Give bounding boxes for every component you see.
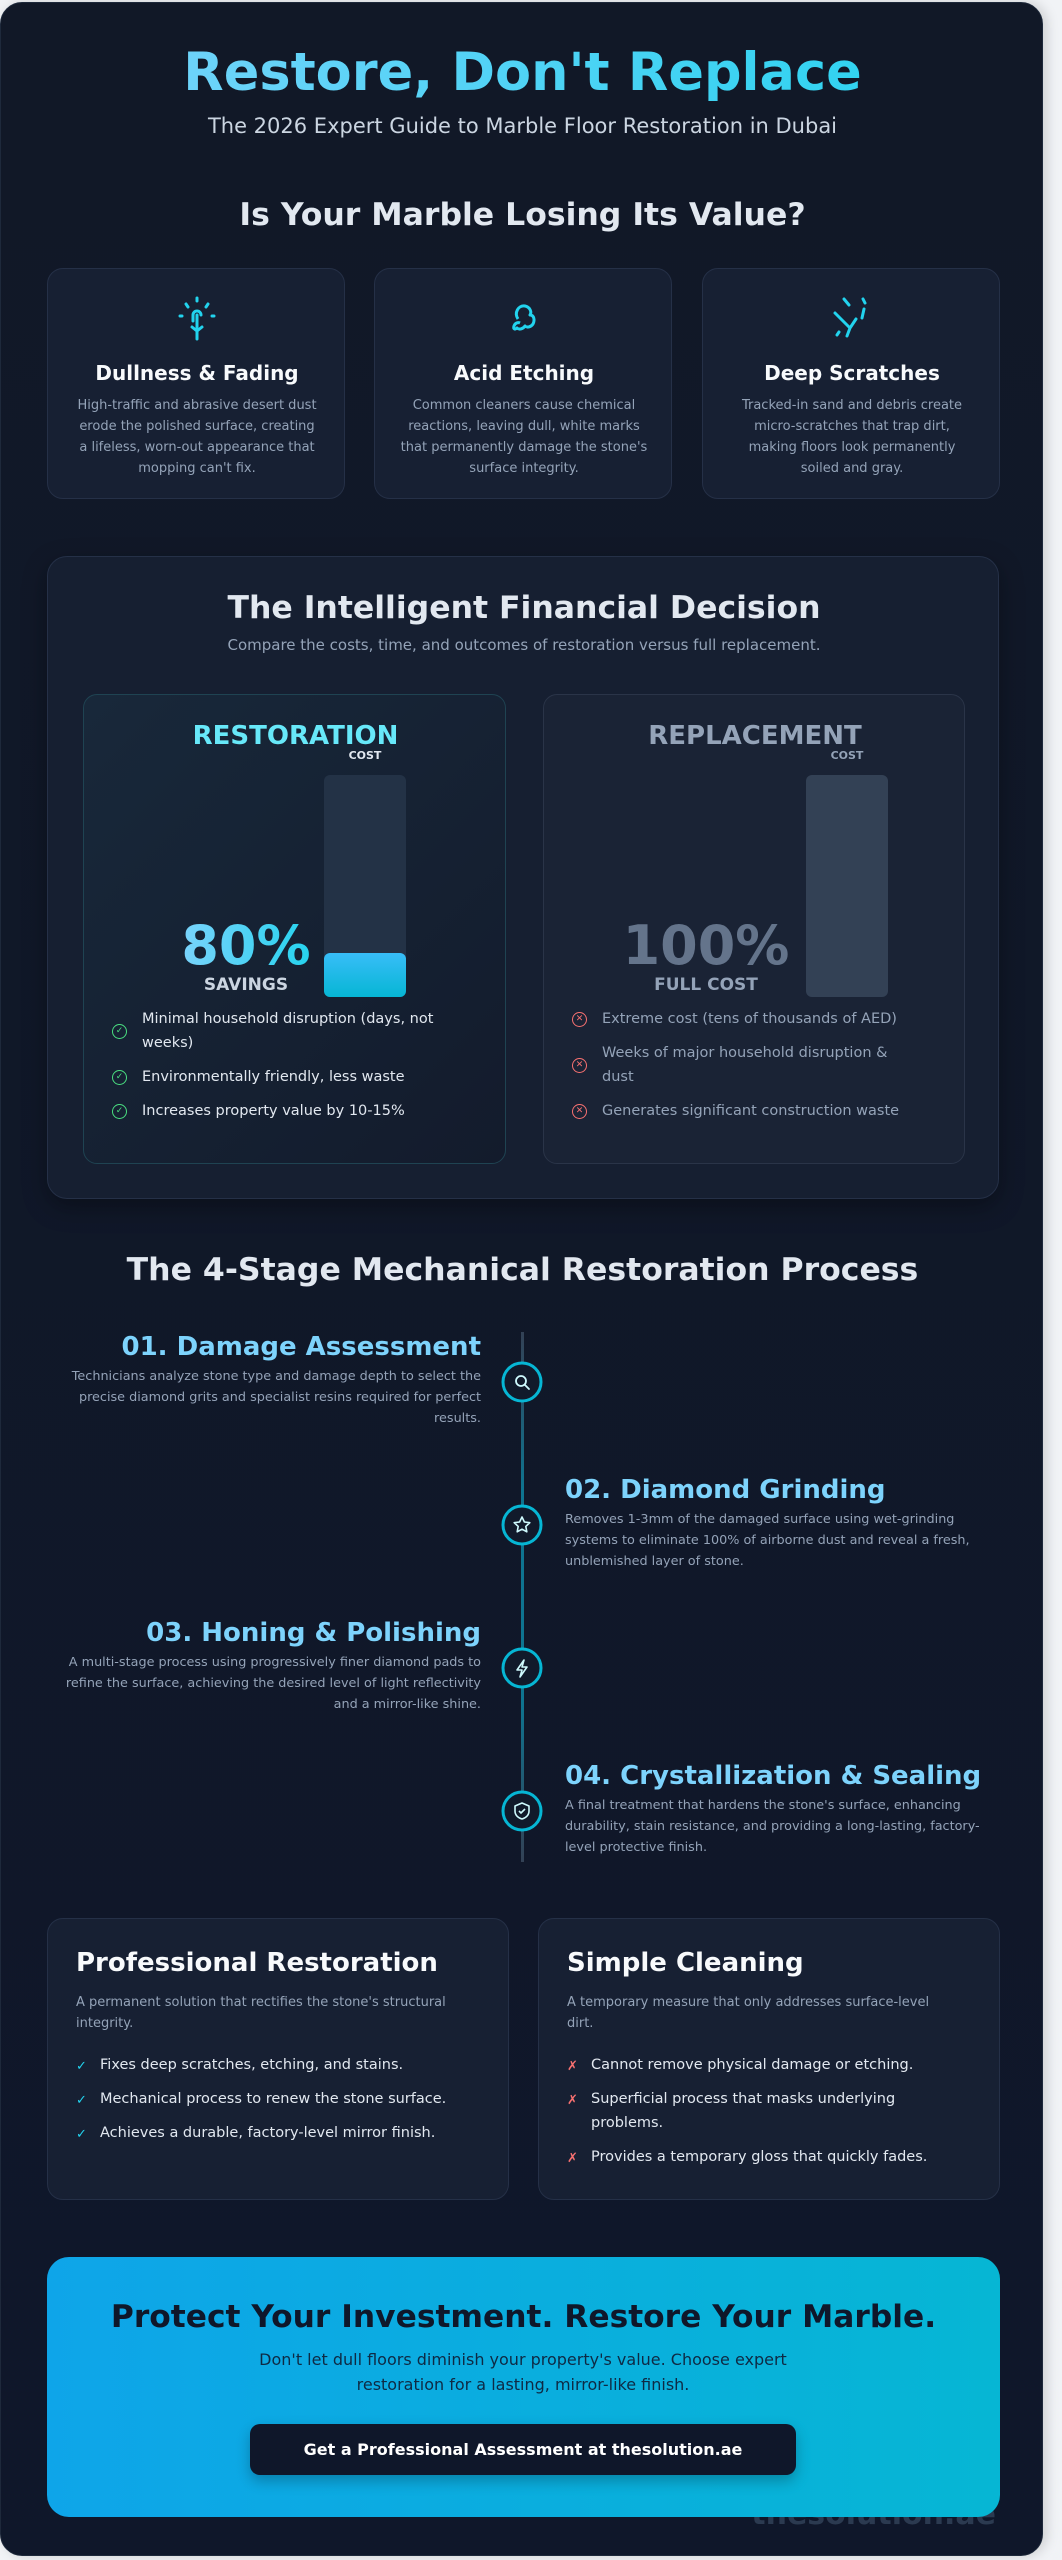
icon: drop <box>512 304 536 331</box>
text: dullness: High-traffic and abrasive desert dust erode the polished surface, creating a lifeless, worn-out appearance that mopping can't fix. <box>77 398 317 476</box>
list: professional: ✓ <box>76 2127 87 2142</box>
panel: scratches <box>702 268 1000 499</box>
icon: sparkle <box>178 296 216 340</box>
list: professional: ✓ <box>76 2093 87 2108</box>
step 2 <box>565 1475 970 1569</box>
stat: 80%: SAVINGS <box>204 975 288 995</box>
button <box>250 2424 796 2475</box>
list: professional: Fixes deep scratches, etching, and stains. <box>100 2057 403 2073</box>
panel: restoration <box>83 694 506 1164</box>
text: scratches <box>742 361 962 476</box>
list: restoration benefits: Minimal household disruption (days, not weeks) <box>142 1011 433 1051</box>
title <box>1 40 1044 106</box>
step 1 <box>72 1332 481 1426</box>
step 1: Technicians analyze stone type and damage depth to select the precise diamond grits and specialist resins required for perfect results. <box>72 1369 481 1426</box>
list: professional: Achieves a durable, factory-level mirror finish. <box>100 2125 435 2141</box>
list: replacement drawbacks: Weeks of major household disruption & dust <box>602 1045 887 1085</box>
list: restoration benefits: ✓ <box>116 1072 123 1082</box>
text: acid: Acid Etching <box>454 361 594 385</box>
label: cost: COST <box>349 749 381 762</box>
stat: 80%: 80% <box>181 914 311 977</box>
step 3: A multi-stage process using progressively finer diamond pads to refine the surface, achieving the desired level of light reflectivity and a mirror-like shine. <box>66 1655 481 1712</box>
watermark: thesolution.ae <box>751 2497 996 2532</box>
panel: dullness <box>47 268 345 499</box>
list: restoration benefits: Environmentally friendly, less waste <box>142 1069 405 1085</box>
list: simple: ✗ <box>567 2059 578 2074</box>
list: replacement drawbacks: ✕ <box>576 1060 583 1070</box>
step 2: Removes 1-3mm of the damaged surface using wet-grinding systems to eliminate 100% of airborne dust and reveal a fresh, unblemished layer of stone. <box>565 1512 970 1569</box>
panel: acid <box>374 268 672 499</box>
panel: call to action <box>47 2257 1000 2517</box>
text: acid <box>401 361 647 476</box>
list: professional <box>76 2057 446 2142</box>
bar chart: restoration <box>324 775 406 997</box>
icon: shield <box>502 1790 542 1832</box>
panel: replacement <box>543 694 965 1164</box>
label: replacement: REPLACEMENT <box>648 721 862 751</box>
heading: simple: Simple Cleaning <box>567 1948 804 1978</box>
heading: financial: The Intelligent Financial Decision <box>227 590 821 626</box>
title: Restore, Don't Replace <box>183 42 862 103</box>
text: compare: Compare the costs, time, and outcomes of restoration versus full replacement. <box>227 636 820 654</box>
icon: search <box>502 1362 542 1402</box>
icon: bolt <box>502 1648 542 1688</box>
text: dullness: Dullness & Fading <box>95 361 299 385</box>
list: simple: ✗ <box>567 2151 578 2166</box>
heading: value: Is Your Marble Losing Its Value? <box>239 197 806 233</box>
label: restoration: RESTORATION <box>193 721 398 751</box>
list: simple: Superficial process that masks underlying problems. <box>591 2091 895 2131</box>
list: replacement drawbacks <box>572 1011 899 1119</box>
text: simple desc: A temporary measure that only addresses surface-level dirt. <box>567 1995 929 2031</box>
stat: 100%: 100% <box>623 914 789 977</box>
step 3 <box>66 1618 481 1712</box>
list: replacement drawbacks: Generates significant construction waste <box>602 1103 899 1119</box>
subtitle: The 2026 Expert Guide to Marble Floor Restoration in Dubai <box>208 114 837 138</box>
step 4: 04. Crystallization & Sealing <box>565 1761 981 1791</box>
heading: process: The 4-Stage Mechanical Restoration Process <box>127 1252 918 1288</box>
label: cost: COST <box>831 749 863 762</box>
text: scratches: Tracked-in sand and debris create micro-scratches that trap dirt, making floors look permanently soiled and gray. <box>742 398 962 476</box>
list: replacement drawbacks: ✕ <box>576 1014 583 1024</box>
text: professional desc: A permanent solution that rectifies the stone's structural integrity. <box>76 1995 446 2031</box>
panel: professional restoration <box>47 1918 509 2200</box>
list: replacement drawbacks: ✕ <box>576 1106 583 1116</box>
list: simple: ✗ <box>567 2093 578 2108</box>
step 1: 01. Damage Assessment <box>122 1332 481 1362</box>
list: restoration benefits <box>112 1011 434 1119</box>
step 2: 02. Diamond Grinding <box>565 1475 886 1505</box>
list: restoration benefits: ✓ <box>116 1026 123 1036</box>
timeline <box>502 1332 542 1862</box>
list: simple: Provides a temporary gloss that quickly fades. <box>591 2149 927 2165</box>
stat: 100%: FULL COST <box>654 975 758 995</box>
text: cta: Don't let dull floors diminish your property's value. Choose expert restoration for a lasting, mirror-like finish. <box>259 2350 787 2394</box>
list: professional: ✓ <box>76 2059 87 2074</box>
heading: professional: Professional Restoration <box>76 1948 438 1978</box>
list: simple <box>567 2057 927 2166</box>
list: restoration benefits: Increases property value by 10-15% <box>142 1103 405 1119</box>
list: simple: Cannot remove physical damage or etching. <box>591 2057 913 2073</box>
text: scratches: Deep Scratches <box>764 361 940 385</box>
panel: financial decision <box>47 556 999 1199</box>
text: acid: Common cleaners cause chemical reactions, leaving dull, white marks that permanently damage the stone's surface integrity. <box>401 398 647 476</box>
bar chart: replacement <box>806 775 888 997</box>
heading: cta: Protect Your Investment. Restore Your Marble. <box>111 2299 936 2335</box>
list: replacement drawbacks: Extreme cost (tens of thousands of AED) <box>602 1011 897 1027</box>
panel: simple cleaning <box>538 1918 1000 2200</box>
icon: scratches <box>833 297 866 338</box>
step 4 <box>565 1761 981 1855</box>
step 4: A final treatment that hardens the stone's surface, enhancing durability, stain resistance, and providing a long-lasting, factory-level protective finish. <box>565 1798 980 1855</box>
list: restoration benefits: ✓ <box>116 1106 123 1116</box>
text: dullness <box>77 361 317 476</box>
button: Get a Professional Assessment at thesolution.ae <box>304 2440 742 2459</box>
icon: star <box>502 1504 542 1546</box>
list: professional: Mechanical process to renew the stone surface. <box>100 2091 446 2107</box>
step 3: 03. Honing & Polishing <box>146 1618 481 1648</box>
